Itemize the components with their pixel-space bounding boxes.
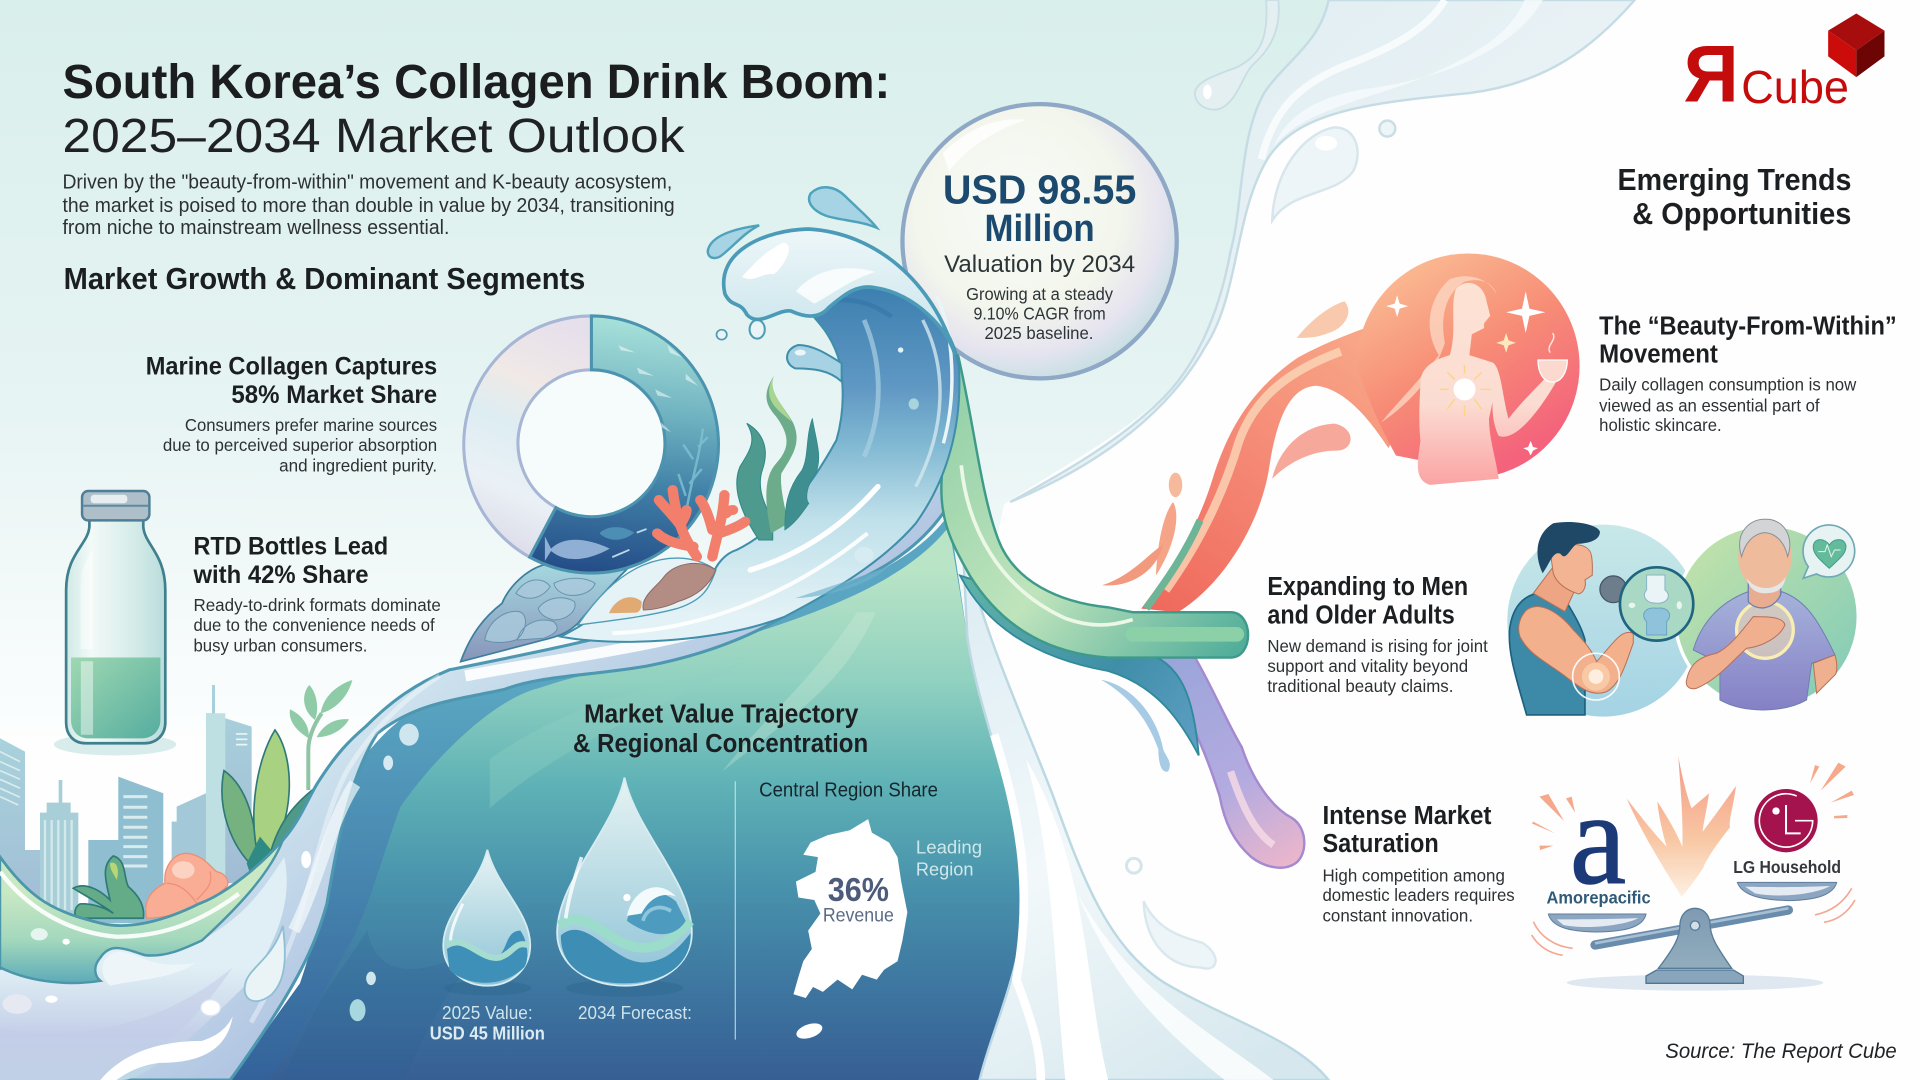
text: RTD bottles: RTD Bottles Lead [193, 533, 388, 561]
plant: background sprig [290, 680, 352, 790]
wave body [561, 286, 959, 642]
text: RTD bottles [193, 533, 441, 655]
decorative droplets top right [1272, 121, 1395, 220]
ledge [578, 558, 716, 625]
donut: iridescent other segment [464, 316, 591, 557]
stream: green [941, 343, 1248, 658]
stream: coral [1141, 321, 1408, 612]
athlete [1509, 522, 1633, 715]
text: market saturation: Intense Market [1322, 802, 1492, 830]
text: market saturation: domestic leaders requires [1322, 885, 1515, 905]
flower [146, 853, 228, 918]
source note: Source: The Report Cube [1665, 1040, 1897, 1063]
map: central region share: Region [916, 859, 973, 880]
map: central region share: Revenue [823, 905, 894, 926]
sparkles [1386, 291, 1545, 456]
logo: amorepacific: a [1570, 765, 1626, 912]
logo: Cube [1741, 61, 1849, 113]
LG logo [1754, 789, 1818, 852]
text: men and older adults: support and vitality beyond [1267, 656, 1468, 676]
labels: drop values: 2025 Value: [442, 1002, 533, 1023]
plant: big leaves [222, 730, 317, 883]
bubble: 2034 valuation: Growing at a steady [966, 284, 1113, 304]
pool bubbles [350, 724, 419, 1021]
divider [734, 781, 736, 1040]
intro text: Driven by the "beauty-from-within" movement and K-beauty acosystem, [62, 172, 672, 194]
icon: 2025 water drop [443, 850, 531, 996]
fish [545, 527, 647, 561]
plant: small green [73, 856, 144, 918]
bottle [54, 491, 176, 756]
heading: emerging trends [1618, 163, 1851, 231]
heading: market value trajectory: & Regional Concentration [573, 730, 868, 758]
green band [0, 840, 283, 986]
heading: market value trajectory: Market Value Trajectory [584, 700, 859, 728]
map: central region share: 36% [828, 872, 889, 909]
nub splash [787, 345, 842, 382]
translucent top-right water ribbons [1010, 0, 1635, 502]
pillar [1658, 908, 1732, 968]
left pan [1548, 914, 1646, 932]
text: RTD bottles: with 42% Share [193, 561, 369, 589]
coral and brown rocks [578, 490, 745, 625]
heading: emerging trends: Emerging Trends [1618, 163, 1851, 197]
wave crest [708, 187, 955, 355]
text: marine collagen: due to perceived superior absorption [163, 435, 437, 455]
text: marine collagen: Consumers prefer marine sources [185, 415, 437, 435]
text: market saturation: Saturation [1322, 830, 1439, 858]
title: South Korea’s Collagen Drink Boom: [62, 56, 890, 109]
text: marine collagen: 58% Market Share [231, 381, 437, 409]
right pan [1737, 882, 1837, 901]
text: beauty from within [1599, 312, 1897, 435]
rocks [461, 565, 626, 662]
illustration: men and older adults [1507, 519, 1860, 717]
joint lens [1620, 567, 1693, 641]
city skyline [0, 685, 252, 923]
intro text: from niche to mainstream wellness essential. [62, 217, 449, 239]
logo: Я [1684, 30, 1739, 120]
stream: teal [960, 576, 1199, 756]
left water ribbon [0, 465, 967, 1080]
map: central region share: Leading [916, 836, 982, 857]
donut: hole [518, 370, 665, 517]
text: marine collagen [146, 353, 437, 475]
text: marine collagen: and ingredient purity. [279, 455, 437, 475]
heading: market growth: Market Growth & Dominant Segments [64, 262, 585, 296]
icon: 2034 water drop [557, 778, 692, 997]
speech bubble heart [1803, 525, 1855, 578]
illustration: balance scale [1532, 757, 1855, 991]
text: beauty from within: Movement [1599, 340, 1718, 368]
seaweed [737, 376, 819, 540]
logo cube [1828, 13, 1884, 77]
text: RTD bottles: Ready-to-drink formats dominate [193, 595, 441, 615]
pool: market value panel [230, 514, 1024, 1080]
beam [1595, 910, 1788, 945]
logo [1684, 13, 1884, 120]
illustration: beauty from within [1357, 253, 1580, 485]
text: beauty from within: viewed as an essential part of [1599, 395, 1820, 415]
text: market saturation [1322, 802, 1515, 925]
text: men and older adults: New demand is rising for joint [1267, 636, 1488, 656]
donut: marine collagen 58 percent [530, 316, 718, 573]
title: 2025–2034 Market Outlook [62, 110, 685, 163]
text: men and older adults [1267, 573, 1488, 696]
bubble: 2034 valuation: 2025 baseline. [984, 323, 1093, 343]
text: market saturation: High competition among [1322, 866, 1505, 886]
text: beauty from within: Daily collagen consumption is now [1599, 375, 1856, 395]
heading: market value trajectory [573, 700, 868, 758]
text: men and older adults: and Older Adults [1267, 601, 1455, 629]
intro text: the market is poised to more than double in value by 2034, transitioning [62, 195, 675, 217]
burst [1627, 757, 1736, 897]
drip [245, 851, 311, 1001]
text: men and older adults: traditional beauty claims. [1267, 676, 1453, 696]
logo: amorepacific [1547, 765, 1651, 912]
text: beauty from within: The “Beauty-From-Within” [1599, 312, 1897, 340]
woman figure [1381, 276, 1567, 485]
donut chart: market share [464, 316, 718, 573]
labels: drop values [430, 1002, 692, 1044]
title [62, 56, 890, 163]
impact rays [1532, 763, 1854, 850]
logo: amorepacific: Amorepacific [1547, 888, 1651, 908]
text: market saturation: constant innovation. [1322, 905, 1473, 925]
text: RTD bottles: busy urban consumers. [193, 635, 367, 655]
labels: drop values: 2034 Forecast: [578, 1002, 692, 1023]
text: RTD bottles: due to the convenience needs of [193, 615, 435, 635]
intro text [62, 172, 675, 239]
map: central region share: Central Region Share [759, 780, 938, 802]
brown rocks [609, 563, 716, 613]
stream: purple [1149, 658, 1304, 868]
heading: emerging trends: & Opportunities [1632, 197, 1851, 231]
lavender lower-left [0, 857, 287, 1080]
bubble: 2034 valuation [902, 104, 1177, 378]
right white water ribbon [962, 539, 1329, 1080]
plants and flower [73, 680, 352, 918]
bubble: 2034 valuation: USD 98.55 [943, 166, 1136, 212]
bubble: 2034 valuation: 9.10% CAGR from [973, 304, 1106, 324]
text: men and older adults: Expanding to Men [1267, 573, 1468, 601]
wave [561, 286, 959, 642]
labels: drop values: USD 45 Million [430, 1023, 545, 1044]
coral branches [657, 490, 745, 557]
text: beauty from within: holistic skincare. [1599, 415, 1722, 435]
bubble: 2034 valuation: Million [984, 208, 1095, 250]
map: central region share [759, 780, 982, 1042]
swooshes [1101, 301, 1351, 772]
label: LG household: LG Household [1733, 857, 1841, 877]
text: marine collagen: Marine Collagen Captures [146, 353, 437, 381]
older man [1686, 519, 1837, 710]
bubble: 2034 valuation: Valuation by 2034 [944, 251, 1135, 278]
green and teal trend streams [941, 301, 1408, 868]
